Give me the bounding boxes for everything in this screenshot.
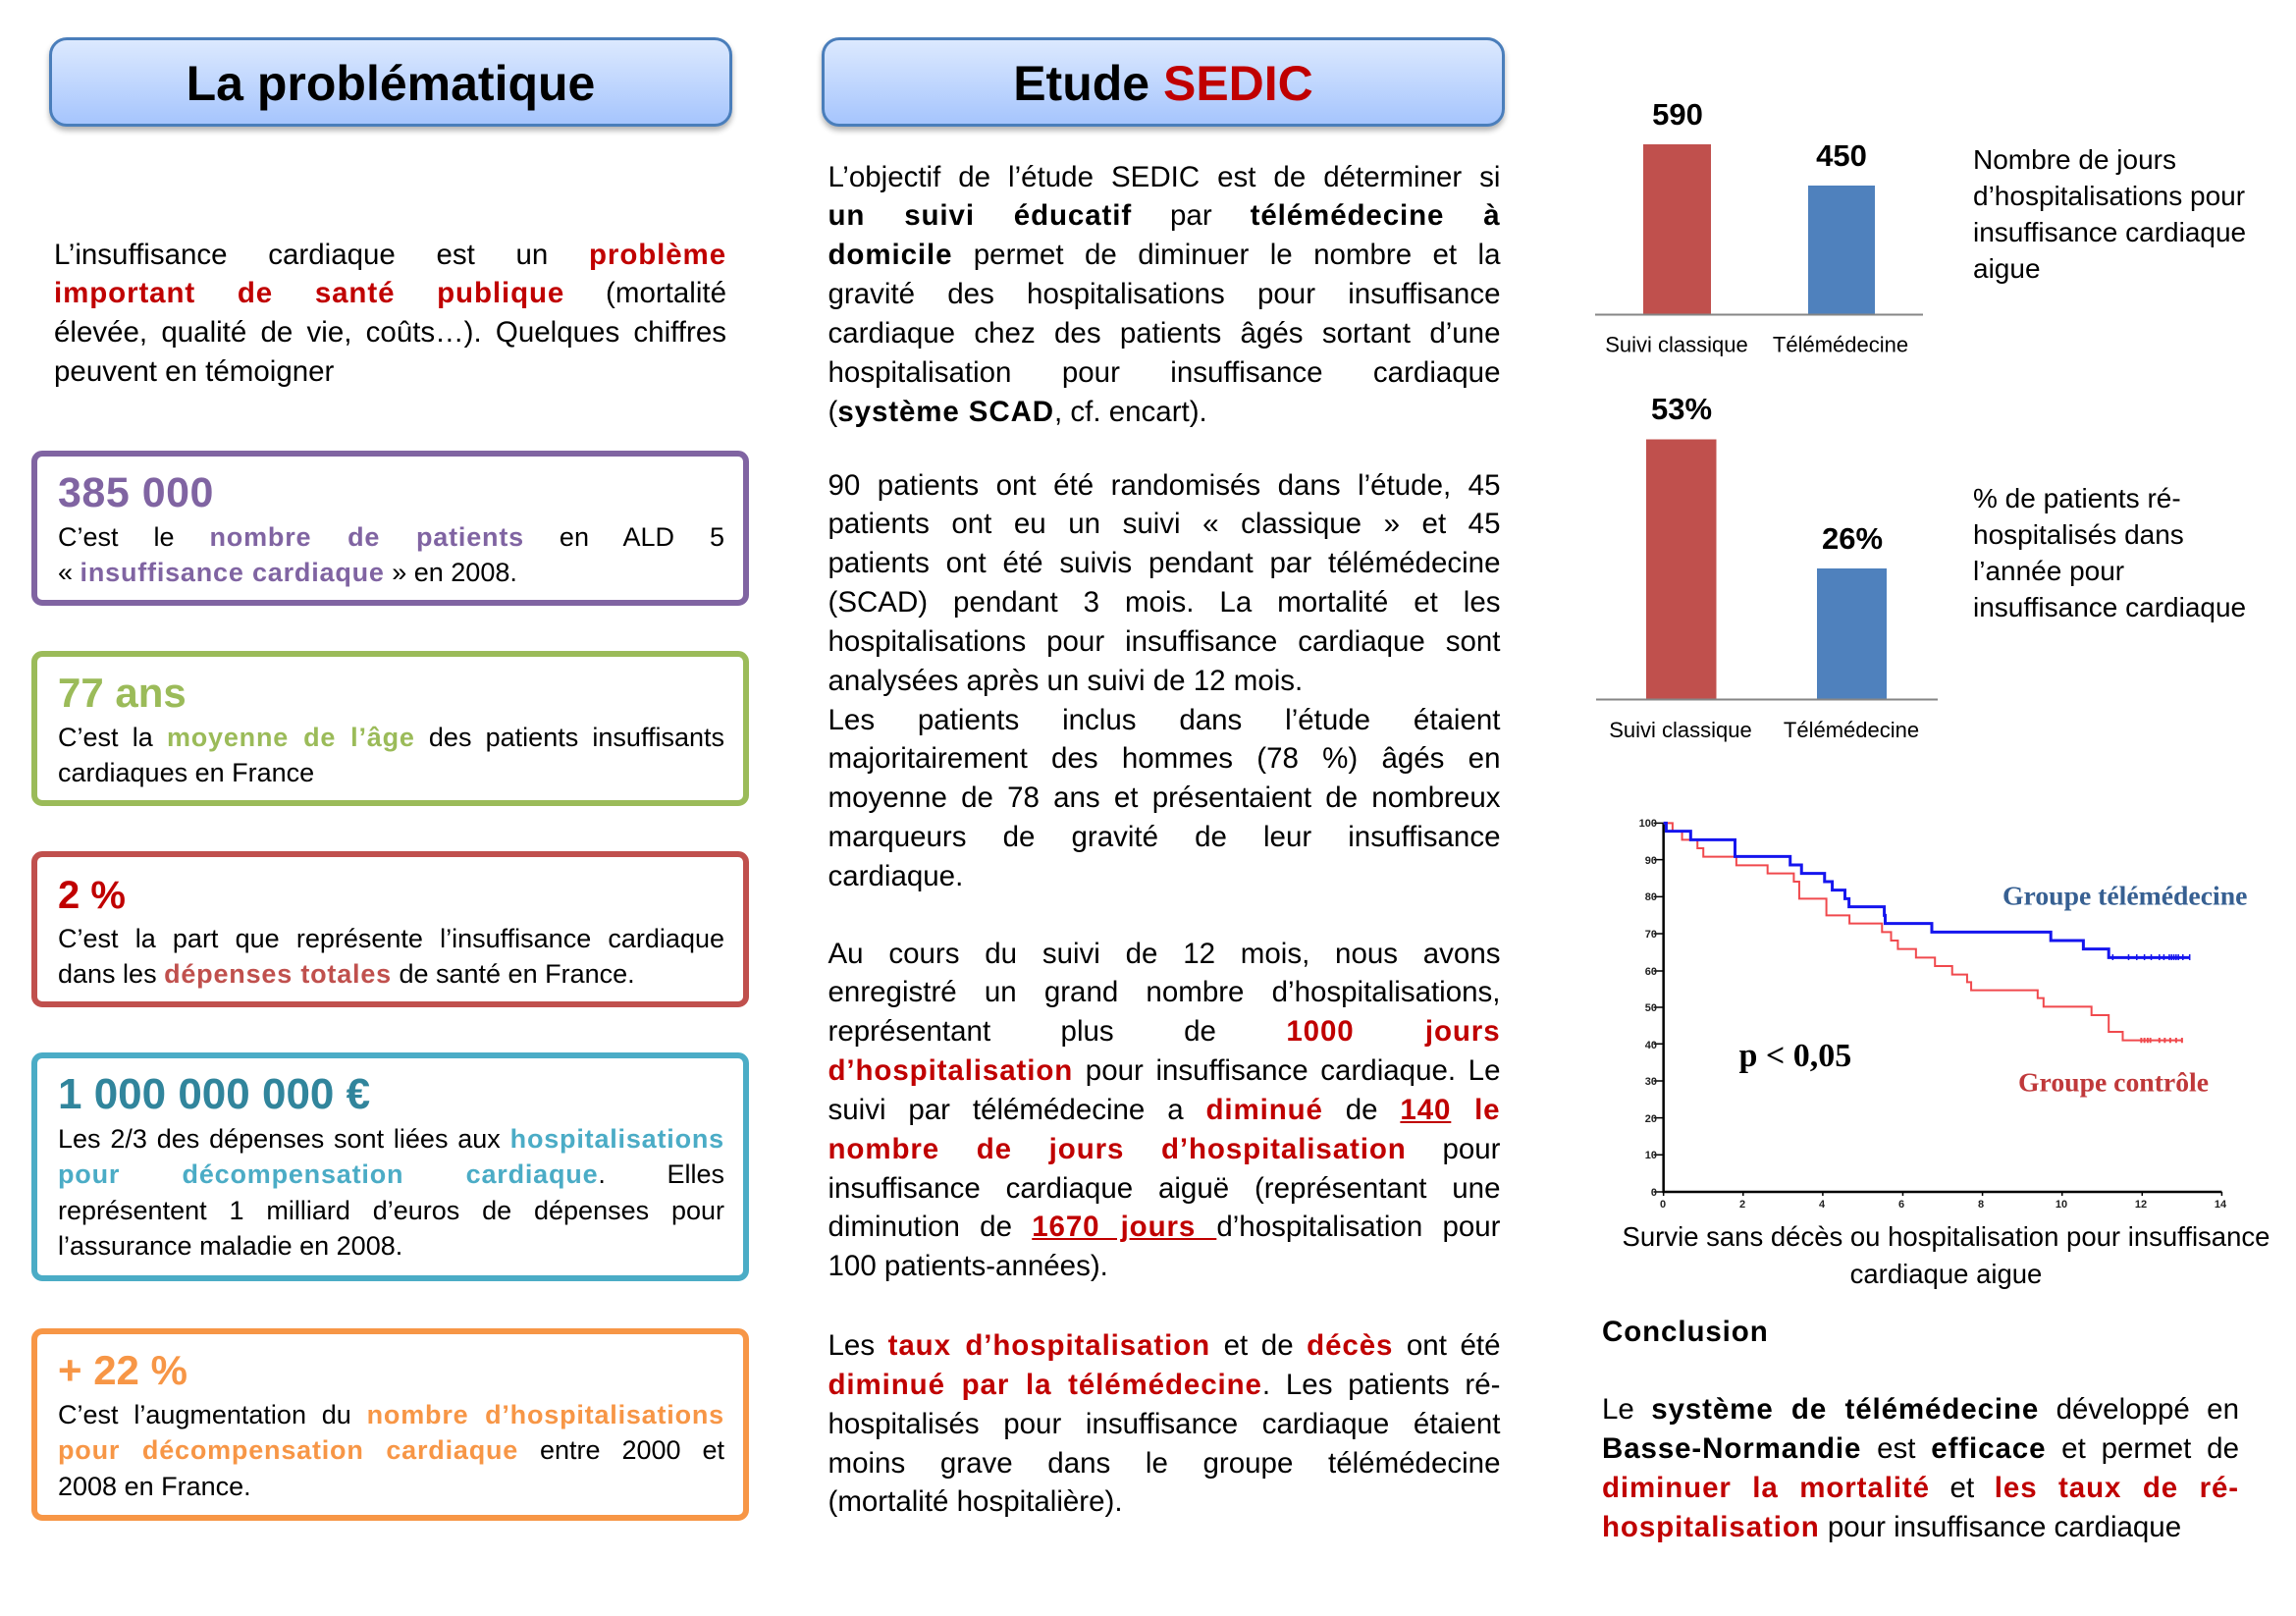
bar: suivi classique 590 bbox=[1643, 97, 1711, 314]
bar chart: patients ré-hospitalisés bbox=[1596, 392, 1938, 742]
axis labels: Suivi classique bbox=[1609, 718, 1752, 742]
text block: conclusion: diminuer la mortalité et les taux de ré- bbox=[1602, 1472, 2239, 1504]
panel: + 22 % bbox=[31, 1328, 749, 1520]
text block: introduction: élevée, qualité de vie, coûts…). Quelques chiffres bbox=[54, 316, 726, 349]
y axis tick labels: 50 bbox=[1645, 1002, 1657, 1014]
text block: résultats hospitalisation: diminution de 1670 jours d’hospitalisation pour bbox=[828, 1211, 1501, 1243]
bar chart: nombre de jours d'hospitalisation bbox=[1595, 97, 1923, 357]
x axis tick labels: 0 bbox=[1660, 1199, 1666, 1211]
axis labels bbox=[1609, 718, 1919, 742]
caption: survie: Survie sans décès ou hospitalisation pour insuffisance bbox=[1623, 1221, 2269, 1252]
y axis tick labels: 80 bbox=[1645, 891, 1657, 903]
text: légende patients ré-hospitalisés: insuffisance cardiaque bbox=[1973, 591, 2246, 622]
y axis tick labels: 90 bbox=[1645, 855, 1657, 867]
text block: méthode: majoritairement des hommes (78 %) âgés en bbox=[828, 742, 1500, 775]
y axis tick labels: 70 bbox=[1645, 929, 1657, 941]
bar: télémédecine 26% bbox=[1817, 521, 1887, 699]
text block: méthode: patients ont eu un suivi « classique » et 45 bbox=[828, 508, 1500, 540]
text block: introduction bbox=[54, 238, 726, 388]
figure: 385 000: 385 000 bbox=[58, 469, 214, 516]
label: p value: p < 0,05 bbox=[1739, 1038, 1851, 1074]
heading: Etude SEDIC: Etude SEDIC bbox=[1013, 56, 1313, 111]
text block: méthode: (SCAD) pendant 3 mois. La mortalité et les bbox=[828, 586, 1500, 619]
survival chart bbox=[1639, 818, 2247, 1211]
text block: conclusion: Le système de télémédecine développé en bbox=[1602, 1392, 2239, 1426]
text: légende nombre de jours: Nombre de jours bbox=[1973, 143, 2176, 175]
text block: méthode: 90 patients ont été randomisés dans l’étude, 45 bbox=[828, 469, 1500, 501]
y axis tick labels: 10 bbox=[1645, 1150, 1657, 1161]
text block: résultats hospitalisation: représentant plus de 1000 jours bbox=[828, 1015, 1500, 1048]
text block: méthode: analysées après un suivi de 12 mois. bbox=[828, 665, 1303, 697]
text block: méthode: hospitalisations pour insuffisance cardiaque sont bbox=[828, 625, 1500, 658]
text: 77 ans description: C’est la moyenne de l’âge des patients insuffisants bbox=[58, 723, 724, 752]
caption: survie: cardiaque aigue bbox=[1850, 1259, 2042, 1288]
axis labels bbox=[1605, 332, 1908, 357]
text block: introduction: peuvent en témoigner bbox=[54, 355, 334, 388]
text block: objectif de l'étude: un suivi éducatif par télémédecine à bbox=[828, 199, 1501, 232]
panel: 77 ans bbox=[31, 651, 749, 806]
text block: résultats hospitalisation: Au cours du suivi de 12 mois, nous avons bbox=[828, 937, 1500, 970]
text block: conclusion: hospitalisation pour insuffisance cardiaque bbox=[1602, 1511, 2181, 1543]
text: légende nombre de jours: insuffisance cardiaque bbox=[1973, 216, 2246, 247]
text block: taux d'hospitalisation et de décès: hospitalisés pour insuffisance cardiaque étaient bbox=[828, 1408, 1500, 1440]
label: groupe contrôle: Groupe contrôle bbox=[2018, 1066, 2209, 1098]
bar: suivi classique 53%: 53% bbox=[1651, 392, 1712, 426]
caption: survie bbox=[1623, 1221, 2269, 1289]
y axis tick labels: 30 bbox=[1645, 1076, 1657, 1088]
heading: La problématique bbox=[49, 37, 732, 127]
text block: taux d'hospitalisation et de décès: moins grave dans le groupe télémédecine bbox=[828, 1447, 1500, 1480]
text block: résultats hospitalisation: 100 patients-années). bbox=[828, 1250, 1108, 1282]
text: 1 000 000 000 € description: l’assurance maladie en 2008. bbox=[58, 1231, 402, 1261]
x axis tick labels: 4 bbox=[1819, 1199, 1826, 1211]
figure: 77 ans: 77 ans bbox=[58, 670, 187, 716]
text: 385 000 description bbox=[58, 522, 724, 587]
axis labels: Télémédecine bbox=[1784, 718, 1919, 742]
text: 2 % description bbox=[58, 923, 724, 989]
text: 77 ans description: cardiaques en France bbox=[58, 758, 314, 787]
text: légende nombre de jours: d’hospitalisations pour bbox=[1973, 181, 2245, 210]
text block: objectif de l'étude bbox=[828, 161, 1501, 428]
text block: résultats hospitalisation bbox=[828, 937, 1501, 1282]
panel: 1 000 000 000 € bbox=[31, 1052, 749, 1280]
text: légende patients ré-hospitalisés: % de patients ré- bbox=[1973, 483, 2181, 512]
text block: conclusion bbox=[1602, 1392, 2239, 1543]
text block: résultats hospitalisation: nombre de jours d’hospitalisation pour bbox=[828, 1133, 1500, 1165]
text block: méthode: cardiaque. bbox=[828, 860, 963, 892]
text: légende patients ré-hospitalisés: hospitalisés dans bbox=[1973, 518, 2184, 550]
bar: télémédecine 26%: 26% bbox=[1822, 521, 1883, 556]
bar: suivi classique 590: 590 bbox=[1652, 97, 1703, 132]
text: 1 000 000 000 € description bbox=[58, 1124, 724, 1261]
text block: objectif de l'étude: domicile permet de diminuer le nombre et la bbox=[828, 239, 1500, 271]
text block: introduction: important de santé publique (mortalité bbox=[54, 277, 726, 309]
figure: 2 %: 2 % bbox=[58, 874, 126, 917]
curve: groupe télémédecine bbox=[1664, 823, 2190, 960]
text block: objectif de l'étude: (système SCAD, cf. encart). bbox=[828, 396, 1207, 428]
text: légende nombre de jours bbox=[1973, 143, 2246, 284]
figure: 1 000 000 000 €: 1 000 000 000 € bbox=[58, 1070, 370, 1118]
y axis tick labels bbox=[1639, 818, 1657, 1199]
y axis tick labels: 100 bbox=[1639, 818, 1657, 830]
text: 2 % description: C’est la part que représente l’insuffisance cardiaque bbox=[58, 923, 724, 952]
x axis tick labels: 8 bbox=[1978, 1199, 1984, 1211]
text block: résultats hospitalisation: insuffisance cardiaque aiguë (représentant une bbox=[828, 1172, 1500, 1205]
text: 1 000 000 000 € description: pour décompensation cardiaque. Elles bbox=[58, 1159, 724, 1189]
text: légende patients ré-hospitalisés bbox=[1973, 483, 2246, 622]
figure: + 22 %: + 22 % bbox=[58, 1347, 187, 1393]
heading: Etude SEDIC bbox=[822, 37, 1505, 127]
text block: introduction: L’insuffisance cardiaque est un problème bbox=[54, 238, 726, 271]
text block: objectif de l'étude: hospitalisation pour insuffisance cardiaque bbox=[828, 356, 1500, 389]
text: + 22 % description bbox=[58, 1400, 724, 1501]
x axis tick labels: 10 bbox=[2056, 1199, 2067, 1211]
text block: conclusion: Basse-Normandie est efficace et permet de bbox=[1602, 1432, 2239, 1465]
text block: taux d'hospitalisation et de décès: (mortalité hospitalière). bbox=[828, 1485, 1123, 1518]
y axis tick labels: 20 bbox=[1645, 1113, 1657, 1125]
text block: méthode: marqueurs de gravité de leur insuffisance bbox=[828, 821, 1500, 853]
axis labels: Télémédecine bbox=[1773, 332, 1908, 357]
text block: méthode bbox=[828, 469, 1500, 892]
text: 77 ans description bbox=[58, 723, 724, 787]
curve: groupe contrôle bbox=[1664, 823, 2183, 1043]
x axis tick labels: 6 bbox=[1898, 1199, 1904, 1211]
y axis tick labels: 0 bbox=[1651, 1187, 1657, 1199]
x axis tick labels: 12 bbox=[2135, 1199, 2147, 1211]
text block: résultats hospitalisation: suivi par télémédecine a diminué de 140 le bbox=[828, 1094, 1500, 1126]
text: 1 000 000 000 € description: représentent 1 milliard d’euros de dépenses pour bbox=[58, 1196, 724, 1225]
panel: 385 000 bbox=[31, 451, 749, 605]
text: 385 000 description: C’est le nombre de patients en ALD 5 bbox=[58, 522, 724, 552]
bar: suivi classique 53% bbox=[1646, 392, 1716, 699]
axis labels: Suivi classique bbox=[1605, 332, 1748, 357]
bar: télémédecine 450 bbox=[1808, 138, 1875, 314]
text block: taux d'hospitalisation et de décès bbox=[828, 1329, 1500, 1518]
text block: objectif de l'étude: L’objectif de l’étude SEDIC est de déterminer si bbox=[828, 161, 1500, 192]
text: + 22 % description: C’est l’augmentation du nombre d’hospitalisations bbox=[58, 1400, 724, 1429]
x axis tick labels: 2 bbox=[1739, 1199, 1745, 1211]
text: légende patients ré-hospitalisés: l’année pour bbox=[1973, 556, 2124, 585]
text: 2 % description: dans les dépenses totales de santé en France. bbox=[58, 959, 635, 989]
text: 385 000 description: « insuffisance cardiaque » en 2008. bbox=[58, 558, 517, 587]
panel: 2 % bbox=[31, 851, 749, 1007]
axes bbox=[1654, 823, 2221, 1196]
bar: télémédecine 450: 450 bbox=[1816, 138, 1867, 173]
heading: conclusion: Conclusion bbox=[1602, 1316, 1769, 1348]
text block: taux d'hospitalisation et de décès: Les taux d’hospitalisation et de décès ont été bbox=[828, 1329, 1500, 1362]
text block: résultats hospitalisation: enregistré un grand nombre d’hospitalisations, bbox=[828, 976, 1500, 1008]
text: + 22 % description: 2008 en France. bbox=[58, 1472, 251, 1501]
heading: La problématique: La problématique bbox=[187, 56, 595, 111]
text: légende nombre de jours: aigue bbox=[1973, 253, 2041, 283]
text: + 22 % description: pour décompensation cardiaque entre 2000 et bbox=[58, 1435, 724, 1465]
text: 1 000 000 000 € description: Les 2/3 des dépenses sont liées aux hospitalisations bbox=[58, 1124, 724, 1154]
text block: taux d'hospitalisation et de décès: diminué par la télémédecine. Les patients ré- bbox=[828, 1369, 1500, 1401]
x axis tick labels bbox=[1660, 1199, 2227, 1211]
text block: objectif de l'étude: gravité des hospitalisations pour insuffisance bbox=[828, 278, 1500, 310]
label: groupe télémédecine: Groupe télémédecine bbox=[2002, 880, 2247, 911]
text block: objectif de l'étude: cardiaque chez des patients âgés sortant d’une bbox=[828, 317, 1500, 350]
text block: méthode: patients ont été suivis pendant par télémédecine bbox=[828, 547, 1500, 579]
y axis tick labels: 40 bbox=[1645, 1040, 1657, 1051]
y axis tick labels: 60 bbox=[1645, 966, 1657, 978]
text block: méthode: Les patients inclus dans l’étude étaient bbox=[828, 704, 1500, 736]
x axis tick labels: 14 bbox=[2215, 1199, 2227, 1211]
text block: méthode: moyenne de 78 ans et présentaient de nombreux bbox=[828, 781, 1500, 814]
text block: résultats hospitalisation: d’hospitalisation pour insuffisance cardiaque. Le bbox=[828, 1054, 1500, 1087]
